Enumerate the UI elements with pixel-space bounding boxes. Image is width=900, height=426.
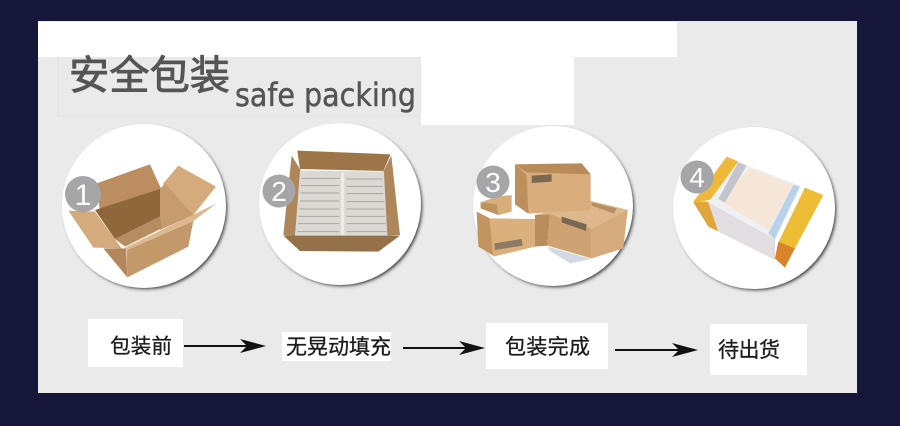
- icon: open cardboard box: [68, 164, 217, 277]
- arrow 1: [184, 339, 266, 353]
- badge 2: [262, 174, 296, 208]
- icon: wrapped parcel: [693, 157, 823, 268]
- badge 4: [680, 160, 714, 194]
- step 4: packed parcel: [673, 127, 836, 290]
- badge 3: 3: [485, 167, 501, 198]
- badge 4: 4: [689, 162, 705, 193]
- badge 2: 2: [271, 176, 287, 207]
- label: packing complete: [486, 323, 608, 369]
- label: before packing: 包装前: [110, 335, 172, 358]
- main panel: [38, 21, 857, 393]
- label: no-shake filling: 无晃动填充: [286, 336, 391, 359]
- icon: stacked boxes: [477, 163, 628, 263]
- label: awaiting shipment: [710, 324, 807, 375]
- step 1: empty open box: [62, 124, 227, 289]
- icon: box with tray: [283, 151, 400, 252]
- arrow 2: [403, 341, 485, 355]
- label: packing complete: 包装完成: [505, 336, 590, 359]
- badge 3: [476, 166, 510, 198]
- label: before packing: [88, 319, 183, 367]
- title strip outline: [58, 57, 421, 116]
- badge 1: 1: [75, 179, 91, 212]
- arrow 3: [615, 343, 698, 357]
- title chinese: 安全包装: [69, 54, 230, 98]
- step 3: sealed boxes: [473, 126, 634, 287]
- title english: safe packing: [235, 76, 416, 114]
- title white patches: [38, 22, 677, 125]
- step 2: filled box: [259, 123, 422, 286]
- title: [69, 54, 416, 114]
- label: awaiting shipment: 待出货: [718, 339, 780, 362]
- badge 1: [65, 176, 101, 212]
